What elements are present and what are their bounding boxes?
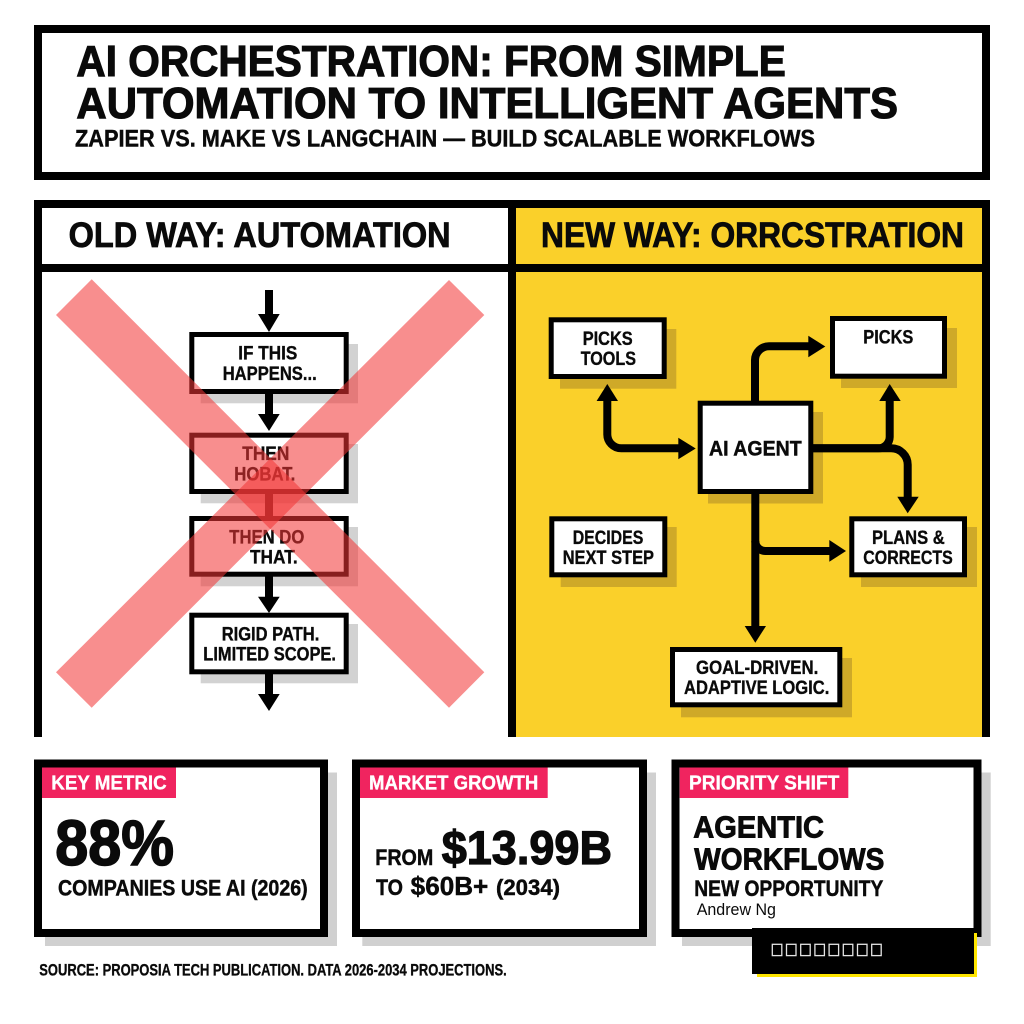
heading: agentic workflows: WORKFLOWS xyxy=(694,841,884,876)
badge: black tag with placeholder squares xyxy=(752,928,977,977)
box: if this happens: IF THIS xyxy=(238,343,297,364)
heading: old way: OLD WAY: AUTOMATION xyxy=(69,216,451,255)
panel: comparison frame xyxy=(34,200,990,737)
box: goal driven xyxy=(672,650,852,717)
stat: to 60B: (2034) xyxy=(496,875,560,900)
title heading: AI ORCHESTRATION: FROM SIMPLE xyxy=(76,38,786,86)
stat: from 13.99B: $13.99B xyxy=(442,821,612,874)
box: decides next step: NEXT STEP xyxy=(563,548,654,569)
icon: red cross xyxy=(56,279,484,708)
box: plans and corrects: PLANS & xyxy=(872,528,945,549)
subtitle: ZAPIER VS. MAKE VS LANGCHAIN — BUILD SCALABLE WORKFLOWS xyxy=(75,126,815,153)
arrow: branch to plans xyxy=(755,540,846,562)
arrow: step one to two xyxy=(258,394,280,431)
box: rigid path xyxy=(192,615,358,683)
box: then what xyxy=(192,435,358,503)
arrow: agent to upper right picks xyxy=(813,384,901,448)
label: priority shift: PRIORITY SHIFT xyxy=(689,771,840,794)
panel: priority shift xyxy=(676,764,991,946)
panel: market growth xyxy=(356,764,656,946)
box: then what: THEN xyxy=(242,444,289,465)
label: key metric: KEY METRIC xyxy=(51,771,167,794)
box: rigid path: LIMITED SCOPE. xyxy=(203,645,336,666)
arrow: exit xyxy=(258,674,280,711)
heading: agentic workflows: AGENTIC xyxy=(693,809,824,844)
box: picks tools: TOOLS xyxy=(581,349,636,370)
label: market growth: MARKET GROWTH xyxy=(369,771,538,794)
box: picks xyxy=(832,318,957,388)
box: then do that: THAT. xyxy=(250,547,298,568)
box: decides next step: DECIDES xyxy=(573,528,643,549)
box: decides next step xyxy=(552,519,677,587)
box: then what: HOBAT. xyxy=(234,465,295,486)
caption: new opportunity: NEW OPPORTUNITY xyxy=(694,876,884,901)
stat: from 13.99B: FROM xyxy=(375,845,433,870)
title panel xyxy=(38,29,986,176)
label: market growth xyxy=(360,768,548,798)
arrow: agent to plans xyxy=(813,448,919,513)
box: picks: PICKS xyxy=(863,327,913,348)
stat: to 60B: TO xyxy=(376,875,403,900)
arrow: agent to goal xyxy=(745,494,766,643)
source note: SOURCE: PROPOSIA TECH PUBLICATION. DATA 2026-2034 PROJECTIONS. xyxy=(39,961,507,979)
panel: new way diagram xyxy=(551,318,977,717)
label: key metric xyxy=(42,768,176,798)
box: goal driven: ADAPTIVE LOGIC. xyxy=(684,678,829,699)
box: picks tools: PICKS xyxy=(583,329,633,350)
box: plans and corrects: CORRECTS xyxy=(863,548,953,569)
box: rigid path: RIGID PATH. xyxy=(222,625,319,646)
box: then do that: THEN DO xyxy=(229,527,304,548)
panel: key metric xyxy=(38,764,337,946)
box: if this happens xyxy=(192,334,358,403)
arrow: step three to four xyxy=(258,576,280,613)
box: if this happens: HAPPENS... xyxy=(223,364,317,385)
stat: 88 percent: 88% xyxy=(55,807,174,879)
heading: agentic workflows xyxy=(693,809,884,876)
box: goal driven: GOAL-DRIVEN. xyxy=(696,658,818,679)
box: ai agent: AI AGENT xyxy=(709,436,802,460)
arrow: entry xyxy=(258,290,280,332)
box: picks tools xyxy=(551,320,676,389)
box: plans and corrects xyxy=(852,519,977,587)
stat: from 13.99B xyxy=(375,821,612,874)
box: ai agent xyxy=(700,403,823,504)
heading: new way: NEW WAY: ORRCSTRATION xyxy=(541,216,964,255)
stat: to 60B: $60B+ xyxy=(411,873,488,901)
title heading xyxy=(76,38,898,128)
box: then do that xyxy=(192,518,358,586)
panel: old way flowchart xyxy=(192,290,358,711)
stat: to 60B xyxy=(376,873,560,901)
title heading: AUTOMATION TO INTELLIGENT AGENTS xyxy=(76,80,898,128)
caption: attribution: Andrew Ng xyxy=(697,900,776,919)
connector: step two to three xyxy=(265,494,273,516)
arrow: agent to picks xyxy=(755,336,825,401)
caption: companies use ai: COMPANIES USE AI (2026) xyxy=(58,876,308,901)
arrow: agent and picks tools xyxy=(597,384,696,459)
